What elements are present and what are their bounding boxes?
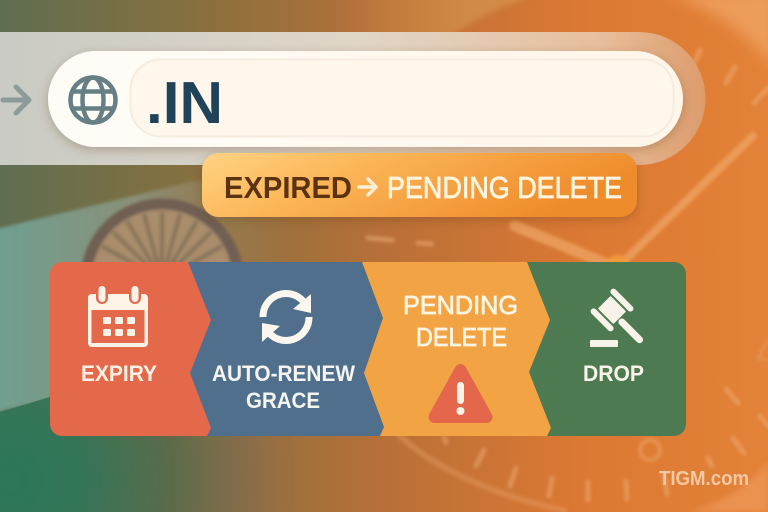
step: drop — [500, 262, 686, 436]
address bar outer band — [0, 32, 706, 165]
clock bezel highlight right — [660, 0, 768, 70]
icon: refresh arrows — [262, 293, 311, 342]
label: auto-renew grace: AUTO-RENEW — [212, 361, 355, 386]
label: drop: DROP — [583, 361, 644, 386]
label: pending delete: PENDING — [403, 292, 518, 320]
icon: calendar — [88, 282, 148, 347]
clock lower right glow — [690, 462, 768, 512]
status arrow — [359, 179, 376, 195]
inset field — [130, 60, 674, 136]
step: pending delete — [340, 262, 551, 436]
icon: warning triangle — [434, 370, 486, 417]
clock hands — [515, 136, 753, 268]
process flow — [50, 262, 686, 436]
status pill — [202, 153, 637, 217]
step: expiry — [50, 262, 211, 436]
pending delete label: PENDING DELETE — [387, 170, 622, 205]
watermark: TIGM.com — [659, 468, 749, 490]
flag green band — [0, 330, 440, 512]
domain text: .IN — [146, 70, 223, 136]
label: expiry: EXPIRY — [81, 361, 157, 386]
step: pending delete: DELETE — [416, 324, 507, 352]
expired label: EXPIRED — [224, 170, 352, 205]
globe icon — [70, 78, 116, 122]
step: auto-renew grace — [180, 262, 384, 436]
clock bezel highlight left — [340, 0, 545, 44]
ashoka chakra wheel — [86, 204, 238, 356]
clock bezel lower arc — [398, 434, 567, 511]
flag white band — [0, 170, 300, 416]
clock ticks and numerals — [368, 50, 768, 500]
step: auto-renew grace: GRACE — [246, 388, 320, 413]
arrow icon — [3, 87, 29, 113]
address pill — [48, 51, 683, 147]
icon: gavel — [589, 287, 655, 353]
